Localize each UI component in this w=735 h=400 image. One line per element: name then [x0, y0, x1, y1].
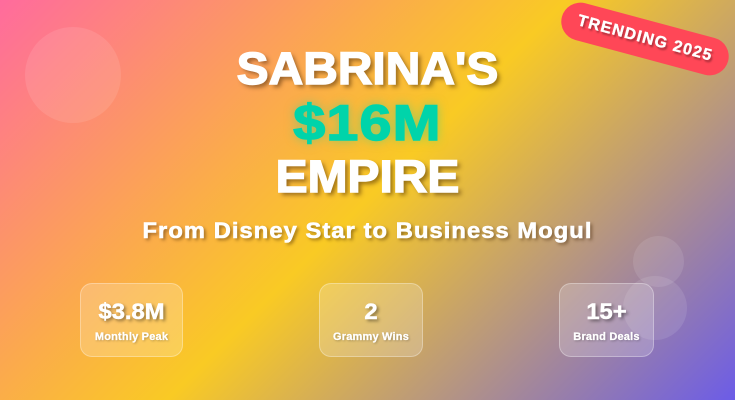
badge: trending 2025: [557, 0, 733, 79]
stat label: Grammy Wins: [333, 331, 409, 343]
title: $16M: $16M: [293, 95, 442, 151]
stat label: Brand Deals: [573, 331, 640, 343]
stat label: Monthly Peak: [95, 331, 168, 343]
badge: trending 2025: TRENDING 2025: [576, 12, 715, 64]
subtitle: From Disney Star to Business Mogul: [142, 218, 593, 242]
title: EMPIRE: EMPIRE: [276, 151, 459, 202]
decorative circle: top left: [25, 27, 121, 123]
stat card: brand deals: [559, 283, 654, 357]
stat card: monthly peak: [80, 283, 183, 357]
decorative circle: right upper: [633, 236, 684, 287]
stat value: $3.8M: [98, 299, 165, 324]
stat value: 15+: [586, 299, 627, 324]
title: SABRINA'S: SABRINA'S: [237, 43, 498, 94]
stat card: grammy wins: [319, 283, 423, 357]
stat value: 2: [364, 299, 378, 324]
decorative circle: right lower: [623, 276, 687, 340]
